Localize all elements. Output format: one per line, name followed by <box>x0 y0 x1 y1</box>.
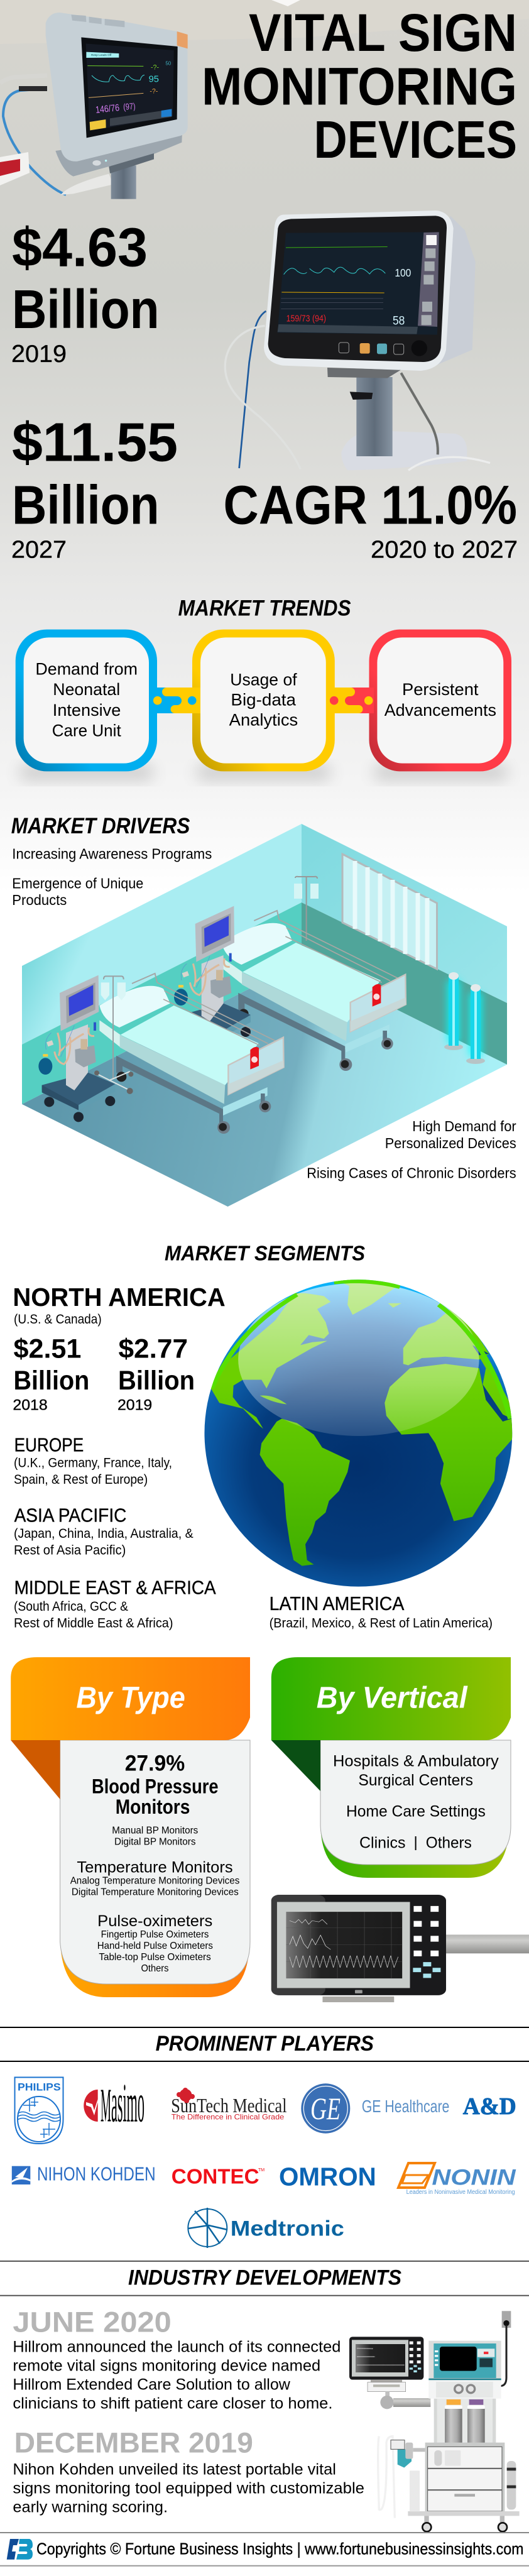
photo: bedside monitor top left: -?- <box>151 64 159 72</box>
photo: large patient monitor: 100 <box>395 266 411 279</box>
driver: emergence of unique products: Products <box>12 892 67 908</box>
driver: increasing awareness programs: Increasing Awareness Programs <box>12 845 212 862</box>
photo: bedside monitor top left: (97) <box>123 101 136 112</box>
region: middle east and africa: Rest of Middle East & Africa) <box>14 1616 173 1630</box>
segment: blood pressure monitors: 27.9% <box>125 1751 185 1776</box>
development: june 2020 <box>13 2306 341 2413</box>
photo: large patient monitor: 58 <box>393 315 405 328</box>
section: prominent players: Masimo <box>101 2073 145 2134</box>
photo: bedside monitor top left: 50 <box>165 60 172 66</box>
region: north america: 2018 <box>13 1397 48 1414</box>
photo: large patient monitor: 159/73 (94) <box>286 314 326 324</box>
statistic: 2019 market value: Billion <box>12 279 160 340</box>
region: middle east and africa <box>14 1577 216 1630</box>
region: north america <box>13 1283 226 1414</box>
panel: usage of big-data analytics: Usage of <box>230 670 297 689</box>
region: latin america <box>270 1592 493 1630</box>
statistic: CAGR: 2020 to 2027 <box>371 536 518 563</box>
photo: bedside monitor top left <box>0 13 188 199</box>
region: europe: EUROPE <box>14 1433 84 1455</box>
segment: blood pressure monitors: Monitors <box>116 1795 190 1818</box>
segment: temperature monitors: Temperature Monitors <box>77 1858 233 1876</box>
photo: bedside monitor top left: -?- <box>150 87 158 95</box>
connector: yellow to red <box>326 688 374 713</box>
region: latin america: LATIN AMERICA <box>270 1592 405 1614</box>
panel: usage of big-data analytics: Analytics <box>229 711 298 730</box>
logo: medtronic <box>188 2208 344 2248</box>
panel: demand from neonatal intensive care unit: Care Unit <box>52 721 121 740</box>
section: prominent players <box>0 2027 529 2261</box>
statistic: CAGR <box>224 474 518 563</box>
region: europe: Spain, & Rest of Europe) <box>14 1472 148 1487</box>
panel: demand from neonatal intensive care unit <box>16 630 157 771</box>
region: asia pacific <box>14 1504 194 1557</box>
logo: suntech medical: The Difference in Clinical Grade <box>172 2113 285 2122</box>
logo: suntech medical: SunTech Medical <box>171 2094 287 2117</box>
segment: temperature monitors <box>70 1858 239 1897</box>
logo: nonin <box>398 2163 516 2196</box>
segment: blood pressure monitors <box>92 1751 219 1847</box>
panel: by type <box>11 1657 250 1997</box>
photo: bedside monitor top left: Resp Leads Off <box>91 53 112 57</box>
list: vertical segments: Surgical Centers <box>358 1772 473 1789</box>
heading: market segments: MARKET SEGMENTS <box>165 1241 365 1264</box>
panel: demand from neonatal intensive care unit: Intensive <box>53 701 121 720</box>
statistic: 2027 market value <box>11 412 178 563</box>
heading: market drivers: MARKET DRIVERS <box>11 814 190 838</box>
segment: pulse-oximeters: Table-top Pulse Oximeters <box>99 1952 211 1963</box>
heading: industry developments: INDUSTRY DEVELOPMENTS <box>128 2266 401 2289</box>
statistic: 2019 market value: $4.63 <box>12 217 148 278</box>
region: north america: $2.51 <box>14 1334 81 1364</box>
footer <box>0 2539 529 2566</box>
region: latin america: (Brazil, Mexico, & Rest of Latin America) <box>270 1616 493 1630</box>
development: june 2020: Hillrom Extended Care Solution to allow <box>13 2376 291 2394</box>
logo: nihon kohden: NIHON KOHDEN <box>37 2162 156 2184</box>
region: middle east and africa: MIDDLE EAST & AFRICA <box>14 1577 216 1599</box>
background gradient of header <box>0 0 529 892</box>
region: asia pacific: Rest of Asia Pacific) <box>14 1543 126 1557</box>
section: industry developments <box>0 2266 529 2533</box>
illustration: hospital room <box>22 824 507 1207</box>
statistic: 2019 market value: 2019 <box>11 341 67 368</box>
development: june 2020: remote vital signs monitoring device named <box>13 2357 320 2375</box>
panel: usage of big-data analytics <box>192 630 335 771</box>
region: north america: NORTH AMERICA <box>13 1283 226 1312</box>
panel: by vertical <box>271 1657 511 1878</box>
heading: by type: By Type <box>76 1682 185 1715</box>
driver: rising cases of chronic disorders: Rising Cases of Chronic Disorders <box>307 1165 516 1181</box>
photo: large patient monitor <box>225 211 490 470</box>
uv lamps <box>444 972 485 1064</box>
segment: pulse-oximeters: Pulse-oximeters <box>97 1912 212 1930</box>
heading: by vertical: By Vertical <box>317 1682 468 1715</box>
front iv pole <box>94 976 133 1094</box>
photo: bedside monitor top left: 95 <box>149 75 159 85</box>
development: december 2019: DECEMBER 2019 <box>14 2427 253 2459</box>
region: asia pacific: (Japan, China, India, Australia, & <box>14 1526 194 1541</box>
logo: omron: OMRON <box>279 2162 376 2191</box>
panel: persistent advancements <box>369 630 511 771</box>
back bed and ventilator <box>38 906 406 1134</box>
panel: usage of big-data analytics: Big-data <box>231 690 297 709</box>
panel: persistent advancements: Persistent <box>402 680 479 699</box>
logo: ge healthcare: GE <box>310 2091 341 2126</box>
title <box>202 3 517 169</box>
region: north america: 2019 <box>117 1397 152 1414</box>
logo: suntech medical <box>171 2088 287 2122</box>
development: june 2020: JUNE 2020 <box>13 2306 172 2338</box>
box shadows <box>19 764 508 781</box>
region: north america: (U.S. & Canada) <box>14 1312 102 1327</box>
list: vertical segments: Hospitals & Ambulatory <box>333 1753 499 1770</box>
development: june 2020: Hillrom announced the launch of its connected <box>13 2338 341 2356</box>
illustration: ecg monitor <box>271 1895 529 2002</box>
logo: philips: PHILIPS <box>18 2081 61 2093</box>
development: june 2020: clinicians to shift patient care closer to home. <box>13 2395 333 2413</box>
logo: nonin: NONIN <box>432 2166 516 2190</box>
list: vertical segments: Others <box>426 1834 472 1851</box>
region: asia pacific: ASIA PACIFIC <box>14 1504 126 1526</box>
panel: persistent advancements: Advancements <box>384 701 496 720</box>
logo: contec: TM <box>258 2168 264 2173</box>
front bed <box>99 973 284 1134</box>
back iv pole <box>294 877 319 941</box>
segment: blood pressure monitors: Manual BP Monitors <box>112 1825 198 1836</box>
heading: prominent players: PROMINENT PLAYERS <box>156 2032 374 2056</box>
development: december 2019: signs monitoring tool equipped with customizable <box>13 2480 364 2497</box>
region: europe: (U.K., Germany, France, Italy, <box>14 1456 172 1471</box>
segment: blood pressure monitors: Blood Pressure <box>92 1775 219 1797</box>
statistic: 2027 market value: Billion <box>12 474 160 535</box>
section: market drivers <box>11 814 516 1207</box>
driver: high demand for personalized devices <box>385 1118 516 1151</box>
logo: nihon kohden <box>12 2162 156 2184</box>
logo: contec: CONTEC <box>172 2164 259 2188</box>
statistic: 2027 market value: $11.55 <box>12 412 178 473</box>
list: vertical segments <box>333 1753 499 1851</box>
segment: pulse-oximeters: Fingertip Pulse Oximeters <box>101 1929 209 1940</box>
driver: high demand for personalized devices: Personalized Devices <box>385 1135 516 1151</box>
segment: pulse-oximeters: Hand-held Pulse Oximeters <box>97 1941 213 1951</box>
section: market trends <box>16 596 511 781</box>
logo: nonin: Leaders in Noninvasive Medical Monitoring <box>406 2189 515 2196</box>
illustration: anesthesia machine <box>349 2311 520 2531</box>
region: north america: $2.77 <box>118 1334 188 1364</box>
section: header <box>0 3 518 563</box>
logo: masimo <box>84 2073 145 2134</box>
development: december 2019: Nihon Kohden unveiled its latest portable vital <box>13 2460 336 2478</box>
development: december 2019 <box>13 2427 364 2516</box>
logo: fortune business insights <box>7 2539 33 2560</box>
segment: temperature monitors: Digital Temperature Monitoring Devices <box>72 1887 239 1897</box>
heading: market trends: MARKET TRENDS <box>178 596 351 620</box>
driver: emergence of unique products <box>12 875 143 908</box>
globe <box>202 1279 516 1587</box>
statistic: 2019 market value <box>11 217 160 368</box>
driver: emergence of unique products: Emergence of Unique <box>12 875 143 892</box>
driver: high demand for personalized devices: High Demand for <box>412 1118 516 1134</box>
segment: pulse-oximeters <box>97 1912 213 1974</box>
logo: medtronic: Medtronic <box>231 2217 344 2240</box>
panel: demand from neonatal intensive care unit: Demand from <box>35 660 138 679</box>
development: december 2019: early warning scoring. <box>13 2499 168 2516</box>
list: vertical segments: Home Care Settings <box>346 1803 486 1821</box>
front ventilator <box>38 975 115 1122</box>
segment: pulse-oximeters: Others <box>141 1963 168 1974</box>
statistic: 2027 market value: 2027 <box>11 536 67 563</box>
photo: bedside monitor top left: 146/76 <box>95 102 120 116</box>
logo: philips <box>15 2078 63 2144</box>
region: middle east and africa: (South Africa, GCC & <box>14 1599 128 1614</box>
section: market segments <box>13 1241 516 1630</box>
list: vertical segments: Clinics <box>359 1834 406 1851</box>
region: europe <box>14 1433 172 1487</box>
connector: blue to yellow <box>153 688 200 713</box>
region: north america: Billion <box>14 1366 89 1396</box>
logo: ge healthcare: GE Healthcare <box>362 2096 449 2116</box>
logo: a and d: A&D <box>463 2093 516 2120</box>
logo: ge healthcare <box>301 2083 449 2134</box>
segment: blood pressure monitors: Digital BP Monitors <box>114 1836 196 1847</box>
panel: demand from neonatal intensive care unit: Neonatal <box>53 680 120 699</box>
region: north america: Billion <box>118 1366 195 1396</box>
segment: temperature monitors: Analog Temperature Monitoring Devices <box>70 1875 239 1886</box>
